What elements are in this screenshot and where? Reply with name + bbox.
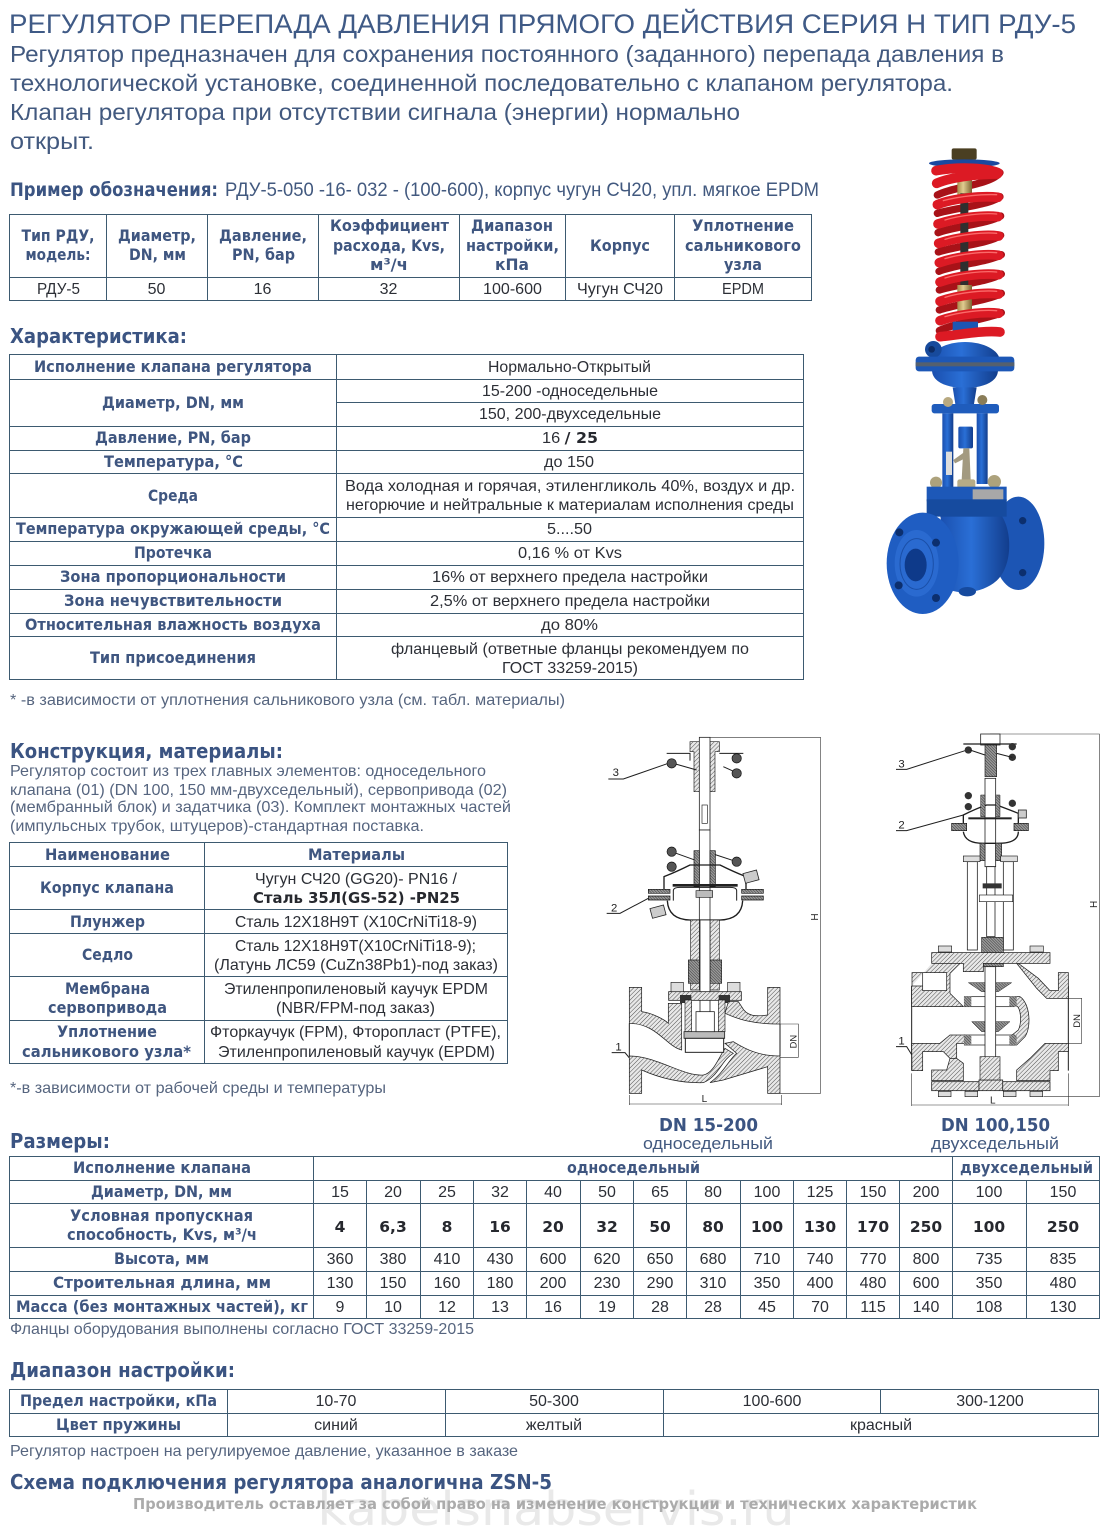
table header: настройки, bbox=[466, 236, 559, 255]
row: diameter: 100 bbox=[976, 1184, 1002, 1201]
footnote: medium: *-в зависимости от рабочей среды и температуры bbox=[10, 1080, 386, 1097]
table header: Давление, bbox=[219, 226, 307, 245]
part numbers: 1 bbox=[898, 1036, 905, 1048]
row: spring color: Цвет пружины bbox=[56, 1415, 181, 1434]
row labels: Высота, мм bbox=[114, 1249, 209, 1268]
photo: top disc bbox=[929, 159, 1000, 167]
row: mass: 10 bbox=[384, 1299, 402, 1316]
adjuster assembly bbox=[963, 734, 1017, 867]
valve body bbox=[629, 987, 780, 1093]
caption: single-seat: DN 15-200 bbox=[659, 1115, 758, 1136]
dimension lines bbox=[629, 737, 821, 1105]
row: mass: 115 bbox=[860, 1299, 886, 1316]
valve body bbox=[912, 946, 1068, 1097]
row: spring color bbox=[56, 1415, 912, 1434]
row: height: 380 bbox=[380, 1251, 406, 1268]
intro text bbox=[10, 41, 1004, 154]
row: length: 480 bbox=[860, 1275, 886, 1292]
row: height: 680 bbox=[700, 1251, 726, 1268]
characteristics table bbox=[10, 354, 804, 680]
table header: модель: bbox=[26, 245, 90, 264]
servo diaphragm bbox=[648, 830, 763, 920]
parameter values: 16 / 25 bbox=[542, 429, 598, 447]
row: Kvs: 32 bbox=[596, 1218, 618, 1236]
row labels: способность, Kvs, м³/ч bbox=[67, 1225, 257, 1244]
row labels: Диаметр, DN, мм bbox=[91, 1182, 232, 1201]
row: mass: 28 bbox=[651, 1299, 669, 1316]
adjuster assembly bbox=[667, 737, 743, 830]
intro text: Клапан регулятора при отсутствии сигнала (энергии) нормально bbox=[10, 99, 740, 125]
parameter names: Зона нечувствительности bbox=[64, 591, 282, 610]
row: length: 290 bbox=[647, 1275, 673, 1292]
row: length: 310 bbox=[700, 1275, 726, 1292]
material names: Плунжер bbox=[70, 912, 145, 931]
servo diaphragm bbox=[952, 792, 1028, 861]
row: mass: 130 bbox=[1050, 1299, 1076, 1316]
part numbers bbox=[898, 758, 905, 1048]
material values: Фторкаучук (FPM), Фторопласт (PTFE), bbox=[210, 1024, 501, 1041]
parameter values: до 150 bbox=[544, 454, 594, 471]
photo: diaphragm housing bbox=[916, 341, 1014, 413]
parameter values: негорючие и нейтральные к материалам исполнения среды bbox=[346, 497, 794, 514]
row: length bbox=[327, 1275, 1076, 1292]
table header: Уплотнение bbox=[692, 216, 794, 235]
table header: узла bbox=[724, 255, 762, 274]
row: height: 430 bbox=[487, 1251, 513, 1268]
designation example bbox=[10, 179, 819, 201]
heading: dimensions: Размеры: bbox=[10, 1129, 110, 1153]
table header: DN, мм bbox=[129, 245, 186, 264]
material names: Уплотнение bbox=[57, 1022, 157, 1041]
parameter names: Давление, PN, бар bbox=[95, 428, 251, 447]
material values: Сталь 35Л(GS-52) -PN25 bbox=[253, 889, 460, 907]
material values: Сталь 12Х18Н9Т (X10CrNiTi18-9) bbox=[235, 914, 477, 931]
drawing: single-seat valve bbox=[607, 737, 821, 1105]
materials table bbox=[10, 842, 508, 1064]
row labels: Исполнение клапана bbox=[73, 1158, 251, 1177]
row: spring color: желтый bbox=[526, 1417, 582, 1434]
row labels bbox=[16, 1158, 308, 1316]
row: height bbox=[327, 1251, 1076, 1268]
row labels: Условная пропускная bbox=[70, 1206, 253, 1225]
construction description bbox=[10, 763, 511, 835]
row: limit: 100-600 bbox=[743, 1393, 801, 1410]
row: length: 350 bbox=[976, 1275, 1002, 1292]
heading: construction: Конструкция, материалы: bbox=[10, 739, 283, 763]
material values: Чугун СЧ20 (GG20)- PN16 / bbox=[255, 871, 458, 888]
intro text: открыт. bbox=[10, 128, 94, 154]
row: height: 360 bbox=[327, 1251, 353, 1268]
drawing: double-seat valve bbox=[896, 734, 1100, 1106]
row: diameter: 40 bbox=[544, 1184, 562, 1201]
photo: red spring bbox=[936, 168, 1000, 337]
row: length: 480 bbox=[1050, 1275, 1076, 1292]
parameter names: Температура окружающей среды, °C bbox=[16, 519, 330, 538]
photo: spring highlights bbox=[943, 195, 997, 317]
row: length: 180 bbox=[487, 1275, 513, 1292]
row: height: 600 bbox=[540, 1251, 566, 1268]
row: Kvs: 80 bbox=[702, 1218, 724, 1236]
part numbers: 2 bbox=[611, 902, 617, 914]
parameter names: Исполнение клапана регулятора bbox=[34, 357, 312, 376]
table values: 50 bbox=[148, 281, 166, 298]
row: limit: 10-70 bbox=[316, 1393, 357, 1410]
row: Kvs: 170 bbox=[857, 1218, 889, 1236]
valve photo bbox=[887, 148, 1044, 614]
row: diameter: 150 bbox=[860, 1184, 886, 1201]
parameter names: Температура, °C bbox=[104, 452, 243, 471]
parameter names: Тип присоединения bbox=[90, 648, 256, 667]
parameter names: Зона пропорциональности bbox=[60, 567, 286, 586]
row: limit bbox=[20, 1391, 1024, 1410]
intro text: технологической установке, соединенной последовательно с клапаном регулятора. bbox=[10, 70, 953, 96]
table values: 100-600 bbox=[483, 281, 542, 298]
parameter names: Диаметр, DN, мм bbox=[102, 393, 244, 412]
parameter values bbox=[345, 359, 795, 677]
photo: stem bbox=[953, 175, 978, 335]
caption: double-seat: DN 100,150 bbox=[941, 1115, 1050, 1136]
row: Kvs: 50 bbox=[649, 1218, 671, 1236]
material names bbox=[22, 845, 192, 1061]
row: height: 620 bbox=[594, 1251, 620, 1268]
table header: сальникового bbox=[685, 236, 801, 255]
part numbers: 3 bbox=[898, 758, 905, 770]
caption: double-seat bbox=[931, 1115, 1059, 1153]
row: diameter: 100 bbox=[754, 1184, 780, 1201]
parameter names: Среда bbox=[148, 486, 198, 505]
row: Kvs: 250 bbox=[1047, 1218, 1079, 1236]
row: diameter: 50 bbox=[598, 1184, 616, 1201]
part numbers: 1 bbox=[615, 1042, 622, 1054]
photo: valve body bbox=[887, 487, 1044, 614]
row: mass: 12 bbox=[438, 1299, 456, 1316]
parameter values: 150, 200-двухседельные bbox=[479, 406, 661, 423]
dimension labels: H bbox=[1089, 901, 1100, 908]
designation table bbox=[10, 214, 812, 300]
row: mass: 16 bbox=[544, 1299, 562, 1316]
row: diameter: 150 bbox=[1050, 1184, 1076, 1201]
row: length: 200 bbox=[540, 1275, 566, 1292]
group headers: двухседельный bbox=[960, 1158, 1093, 1177]
row: Kvs: 4 bbox=[335, 1218, 346, 1236]
row: mass: 108 bbox=[976, 1299, 1002, 1316]
row: diameter: 25 bbox=[438, 1184, 456, 1201]
row: mass bbox=[336, 1299, 1076, 1316]
table header: Корпус bbox=[590, 236, 650, 255]
material names: сервопривода bbox=[48, 998, 167, 1017]
parameter values: 0,16 % от Kvs bbox=[518, 545, 622, 562]
parameter values: Вода холодная и горячая, этиленгликоль 40%, воздух и др. bbox=[345, 478, 795, 495]
footnote: seal: * -в зависимости от уплотнения сальникового узла (см. табл. материалы) bbox=[10, 692, 565, 709]
table header: расхода, Kvs, bbox=[333, 236, 445, 255]
heading: setting range: Диапазон настройки: bbox=[10, 1358, 235, 1382]
bonnet and packing bbox=[669, 920, 741, 1027]
row: height: 740 bbox=[807, 1251, 833, 1268]
table header: Тип РДУ, bbox=[22, 226, 94, 245]
row: diameter: 65 bbox=[651, 1184, 669, 1201]
setting note: Регулятор настроен на регулируемое давление, указанное в заказе bbox=[10, 1443, 518, 1460]
row: Kvs: 20 bbox=[542, 1218, 564, 1236]
row: Kvs: 8 bbox=[442, 1218, 452, 1236]
table header: м³/ч bbox=[370, 255, 408, 274]
material values: (Латунь ЛС59 (CuZn38Pb1)-под заказ) bbox=[214, 957, 498, 974]
table header: Коэффициент bbox=[330, 216, 450, 235]
material values: Материалы bbox=[308, 845, 405, 864]
part numbers bbox=[611, 767, 622, 1054]
row: length: 400 bbox=[807, 1275, 833, 1292]
flange note: Фланцы оборудования выполнены согласно ГОСТ 33259-2015 bbox=[10, 1321, 474, 1338]
row: diameter: 80 bbox=[704, 1184, 722, 1201]
row: diameter: 20 bbox=[384, 1184, 402, 1201]
photo: yoke columns bbox=[930, 413, 1001, 493]
dimension labels: DN bbox=[1072, 1014, 1082, 1028]
part numbers: 2 bbox=[898, 820, 905, 832]
parameter values: Нормально-Открытый bbox=[488, 359, 651, 376]
dimension labels bbox=[702, 913, 821, 1105]
construction description: (импульсных трубок, штуцеров)-стандартная поставка. bbox=[10, 818, 424, 835]
dimension lines bbox=[912, 734, 1099, 1106]
parameter values: фланцевый (ответные фланцы рекомендуем по bbox=[391, 641, 749, 658]
row: diameter: 125 bbox=[807, 1184, 833, 1201]
yoke bbox=[963, 856, 1017, 967]
table values: Чугун СЧ20 bbox=[577, 281, 663, 298]
caption: single-seat bbox=[643, 1115, 773, 1153]
row: Kvs: 100 bbox=[973, 1218, 1005, 1236]
row: length: 150 bbox=[380, 1275, 406, 1292]
table header: Диаметр, bbox=[118, 226, 196, 245]
dimension labels: DN bbox=[789, 1035, 799, 1048]
material names: Корпус клапана bbox=[40, 878, 174, 897]
table values: 32 bbox=[380, 281, 398, 298]
table values: EPDM bbox=[722, 281, 764, 298]
dimension labels bbox=[990, 901, 1100, 1106]
row: height: 410 bbox=[434, 1251, 460, 1268]
row: spring color: синий bbox=[314, 1417, 358, 1434]
row: height: 710 bbox=[754, 1251, 780, 1268]
row: height: 735 bbox=[976, 1251, 1002, 1268]
table header: PN, бар bbox=[232, 245, 295, 264]
row: mass: 28 bbox=[704, 1299, 722, 1316]
material names: Мембрана bbox=[65, 979, 150, 998]
caption: double-seat: двухседельный bbox=[931, 1134, 1059, 1153]
part leaders bbox=[896, 751, 965, 1060]
row: limit: 50-300 bbox=[529, 1393, 579, 1410]
group headers: односедельный bbox=[567, 1158, 700, 1177]
heading: characteristics: Характеристика: bbox=[10, 324, 187, 348]
row: Kvs bbox=[335, 1218, 1079, 1236]
designation example: Пример обозначения: bbox=[10, 179, 218, 201]
material names: Наименование bbox=[45, 845, 170, 864]
row: mass: 45 bbox=[758, 1299, 776, 1316]
dimensions table bbox=[10, 1156, 1100, 1318]
parameter names: Относительная влажность воздуха bbox=[25, 615, 321, 634]
construction description: клапана (01) (DN 100, 150 мм-двухседельный), сервопривода (02) bbox=[10, 782, 507, 799]
row: limit: 300-1200 bbox=[956, 1393, 1024, 1410]
row: length: 230 bbox=[594, 1275, 620, 1292]
dimension labels: L bbox=[702, 1094, 708, 1105]
row: height: 835 bbox=[1050, 1251, 1076, 1268]
row: mass: 19 bbox=[598, 1299, 616, 1316]
parameter values: 15-200 -односедельные bbox=[482, 383, 658, 400]
connection scheme heading: Схема подключения регулятора аналогична ZSN-5 bbox=[10, 1470, 552, 1494]
material values: Сталь 12Х18Н9Т(X10CrNiTi18-9); bbox=[235, 938, 476, 955]
row: Kvs: 16 bbox=[489, 1218, 511, 1236]
row labels: Масса (без монтажных частей), кг bbox=[16, 1297, 308, 1316]
construction description: Регулятор состоит из трех главных элементов: односедельного bbox=[10, 763, 486, 780]
table header: Диапазон bbox=[471, 216, 553, 235]
row: height: 650 bbox=[647, 1251, 673, 1268]
row: spring color: красный bbox=[850, 1417, 912, 1434]
row: limit: Предел настройки, кПа bbox=[20, 1391, 217, 1410]
row: height: 770 bbox=[860, 1251, 886, 1268]
parameter values: 2,5% от верхнего предела настройки bbox=[430, 593, 710, 610]
dimension labels: H bbox=[810, 913, 821, 921]
parameter values: 16% от верхнего предела настройки bbox=[432, 569, 708, 586]
row: length: 600 bbox=[913, 1275, 939, 1292]
parameter values: до 80% bbox=[541, 617, 598, 634]
parameter values: 5....50 bbox=[547, 521, 592, 538]
row: length: 130 bbox=[327, 1275, 353, 1292]
row: Kvs: 130 bbox=[804, 1218, 836, 1236]
row labels: Строительная длина, мм bbox=[53, 1273, 271, 1292]
row: Kvs: 100 bbox=[751, 1218, 783, 1236]
row: mass: 70 bbox=[811, 1299, 829, 1316]
part numbers: 3 bbox=[613, 767, 619, 779]
photo: top cap bbox=[952, 148, 977, 160]
row: diameter bbox=[331, 1184, 1076, 1201]
table values bbox=[37, 281, 764, 298]
title: РЕГУЛЯТОР ПЕРЕПАДА ДАВЛЕНИЯ ПРЯМОГО ДЕЙСТВИЯ СЕРИЯ Н ТИП РДУ-5 bbox=[9, 8, 1076, 39]
setting range table bbox=[10, 1390, 1098, 1436]
material names: сальникового узла* bbox=[22, 1042, 192, 1061]
row: diameter: 15 bbox=[331, 1184, 349, 1201]
parameter names: Протечка bbox=[134, 543, 212, 562]
table header: кПа bbox=[495, 255, 529, 274]
row: Kvs: 250 bbox=[910, 1218, 942, 1236]
group headers bbox=[567, 1158, 1093, 1177]
caption: single-seat: односедельный bbox=[643, 1134, 773, 1153]
row: length: 350 bbox=[754, 1275, 780, 1292]
material names: Седло bbox=[82, 945, 133, 964]
table header bbox=[22, 216, 801, 274]
designation example: РДУ-5-050 -16- 032 - (100-600), корпус чугун СЧ20, упл. мягкое EPDM bbox=[225, 180, 819, 201]
table values: 16 bbox=[254, 281, 272, 298]
material values: Этиленпропиленовый каучук (EPDM) bbox=[218, 1044, 495, 1061]
part leaders bbox=[607, 763, 668, 1067]
row: mass: 13 bbox=[491, 1299, 509, 1316]
construction description: (мембранный блок) и задатчика (03). Комплект монтажных частей bbox=[10, 799, 511, 816]
photo: spring rear coils bbox=[937, 173, 1001, 331]
row: diameter: 200 bbox=[913, 1184, 939, 1201]
dimension labels: L bbox=[990, 1095, 996, 1106]
parameter names bbox=[16, 357, 330, 667]
row: length: 160 bbox=[434, 1275, 460, 1292]
row: diameter: 32 bbox=[491, 1184, 509, 1201]
parameter values: ГОСТ 33259-2015) bbox=[502, 660, 638, 677]
row: mass: 140 bbox=[913, 1299, 939, 1316]
table values: РДУ-5 bbox=[37, 281, 80, 298]
material values: (NBR/FPM-под заказ) bbox=[276, 1000, 435, 1017]
material values bbox=[210, 845, 501, 1061]
row: Kvs: 6,3 bbox=[379, 1218, 407, 1236]
row: height: 800 bbox=[913, 1251, 939, 1268]
intro text: Регулятор предназначен для сохранения постоянного (заданного) перепада давления в bbox=[10, 41, 1004, 67]
row: mass: 9 bbox=[336, 1299, 345, 1316]
material values: Этиленпропиленовый каучук EPDM bbox=[224, 981, 488, 998]
manufacturer disclaimer: Производитель оставляет за собой право на изменение конструкции и технических характеристик bbox=[133, 1495, 977, 1513]
